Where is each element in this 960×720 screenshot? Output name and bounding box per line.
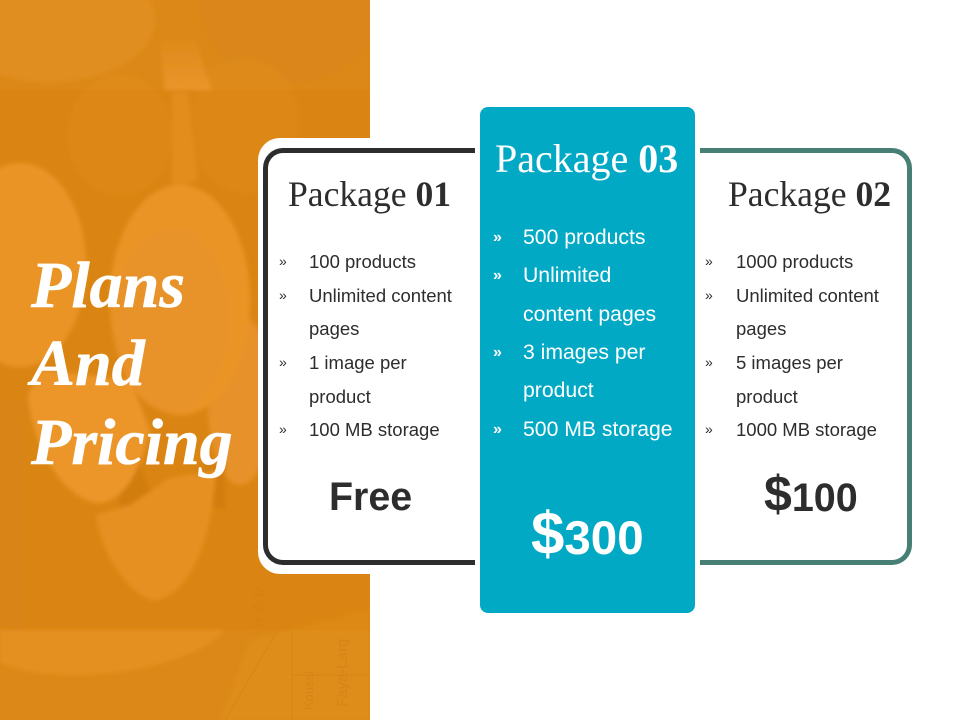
map labels: HAD xyxy=(250,582,265,627)
list: package 01 features: » xyxy=(279,354,287,370)
list: package 02 features: Unlimited content xyxy=(736,285,879,306)
card: package 03 highlighted xyxy=(480,107,695,613)
list: package 03 features: product xyxy=(523,379,594,402)
title: Plans xyxy=(31,249,185,322)
map labels: Koussi xyxy=(301,671,316,710)
card: package 01 xyxy=(263,148,475,565)
title: Pricing xyxy=(31,406,233,479)
list: package 03 features: Unlimited xyxy=(523,264,611,287)
list: package 01 features: Unlimited content xyxy=(309,285,452,306)
map labels: Faya-Larg xyxy=(334,639,351,707)
list: package 02 features: 1000 MB storage xyxy=(736,419,877,440)
list: package 02 features: » xyxy=(705,287,713,303)
list: package 03 features: 500 products xyxy=(523,226,646,249)
list: package 01 features: 100 MB storage xyxy=(309,419,440,440)
list: package 01 features xyxy=(279,251,452,440)
map labels xyxy=(250,582,351,710)
list: package 01 features: » xyxy=(279,421,287,437)
heading: package 03: Package 03 xyxy=(495,136,678,181)
list: package 02 features: product xyxy=(736,386,798,407)
list: package 02 features xyxy=(705,251,879,440)
list: package 02 features: » xyxy=(705,253,713,269)
list: package 01 features: pages xyxy=(309,318,359,339)
price: $300: $300 xyxy=(531,500,644,567)
list: package 02 features: pages xyxy=(736,318,786,339)
heading: package 02: Package 02 xyxy=(728,174,891,214)
card: package 02 xyxy=(700,148,912,565)
list: package 03 features: content pages xyxy=(523,303,656,326)
list: package 03 features: » xyxy=(493,229,502,246)
list: package 03 features: » xyxy=(493,267,502,284)
list: package 03 features xyxy=(493,226,673,441)
list: package 01 features: product xyxy=(309,386,371,407)
list: package 01 features: » xyxy=(279,253,287,269)
list: package 03 features: » xyxy=(493,421,502,438)
title xyxy=(27,249,233,479)
title: And xyxy=(31,327,145,400)
list: package 02 features: » xyxy=(705,421,713,437)
heading: package 01: Package 01 xyxy=(288,174,451,214)
list: package 01 features: 100 products xyxy=(309,251,416,272)
list: package 03 features: 3 images per xyxy=(523,341,645,364)
list: package 03 features: 500 MB storage xyxy=(523,418,673,441)
list: package 03 features: » xyxy=(493,344,502,361)
list: package 02 features: » xyxy=(705,354,713,370)
list: package 01 features: » xyxy=(279,287,287,303)
background photo panel: coins xyxy=(0,0,370,720)
list: package 02 features: 5 images per xyxy=(736,352,843,373)
price: free: Free xyxy=(329,475,412,519)
list: package 02 features: 1000 products xyxy=(736,251,853,272)
price: $100: $100 xyxy=(764,466,858,522)
card: package 01 white backing xyxy=(258,138,370,574)
list: package 01 features: 1 image per xyxy=(309,352,407,373)
